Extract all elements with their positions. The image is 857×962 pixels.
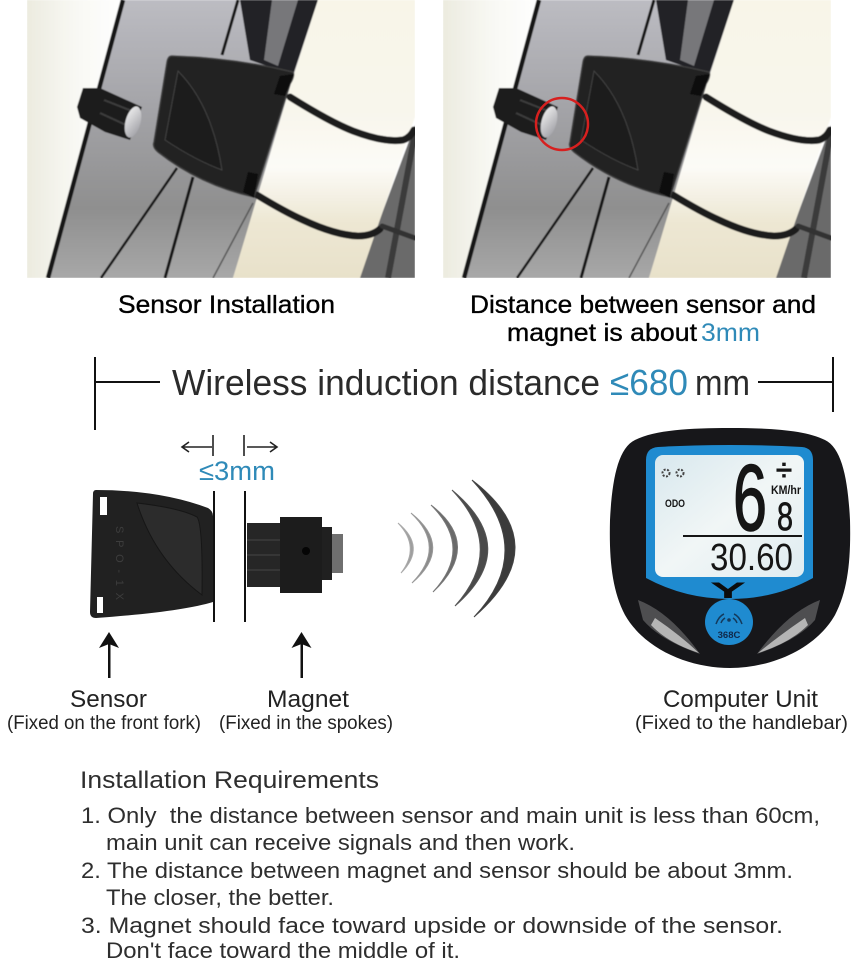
heading: wireless induction distance: mm [695,362,750,403]
caption: sensor and magnet distance: magnet is about [507,319,697,347]
text block: installation requirements: 3. Magnet should face toward upside or downside of the sensor. [81,913,783,938]
blue bezel [646,445,813,599]
caption: sensor installation: Sensor Installation [118,291,335,319]
wheel icons [662,470,684,476]
spokes [48,0,253,278]
red circle on magnet [536,98,588,150]
heading: Installation Requirements [80,767,379,794]
gap arrows [182,435,277,456]
heading: wireless induction distance: ≤680 [610,362,688,403]
label: computer unit [635,686,848,734]
caption: sensor and magnet distance: Distance between sensor and [470,291,816,319]
icon: wireless signal waves [398,480,515,617]
button badge [705,599,753,645]
button windows [638,600,700,654]
screen [655,455,804,577]
speed digit: 6 [733,445,767,550]
cable ties [257,97,415,238]
sensor body [154,56,294,197]
magnet [77,88,144,140]
small digit: 8 [777,495,793,539]
label: sensor: Sensor [70,686,147,713]
caption: sensor and magnet distance: 3mm [701,319,760,347]
speed unit: KM/hr [771,485,801,497]
caption: sensor and magnet distance [470,291,816,347]
label: magnet: Magnet [267,686,349,713]
label: magnet [219,686,393,734]
icon: magnet [247,517,343,593]
label: max 3mm gap: ≤3mm [199,456,275,486]
divide symbol: ÷ [776,454,792,487]
gap guide lines [214,491,245,622]
arrow: to sensor [99,632,119,678]
label: magnet: (Fixed in the spokes) [219,713,393,734]
dimension bracket: wireless induction distance [95,357,833,430]
text block: installation requirements: 1. Only the distance between sensor and main unit is less than 60cm, [81,803,820,828]
text block: installation requirements: The closer, the better. [106,885,334,910]
icon: sensor [90,490,213,618]
photo: distance between sensor and magnet [443,0,831,278]
icon: computer unit: 368C [718,630,740,641]
distance reading: 30.60 [710,537,793,579]
icon: sensor: SPO-1X [113,526,125,601]
label: sensor: (Fixed on the front fork) [7,713,201,734]
text block: installation requirements: 2. The distance between magnet and sensor should be about 3mm. [81,858,793,883]
brand logo: Y [710,578,747,603]
text block: installation requirements [80,767,820,962]
odo label: ODO [665,498,685,510]
arrow: to magnet [292,632,312,678]
label: computer unit: Computer Unit [663,686,818,713]
text block: installation requirements: main unit can receive signals and then work. [106,830,575,855]
heading: wireless induction distance: Wireless induction distance [172,362,600,403]
label: computer unit: (Fixed to the handlebar) [635,713,848,734]
label: sensor [7,686,201,734]
photo: sensor installation [27,0,415,278]
icon: computer unit [610,428,850,668]
